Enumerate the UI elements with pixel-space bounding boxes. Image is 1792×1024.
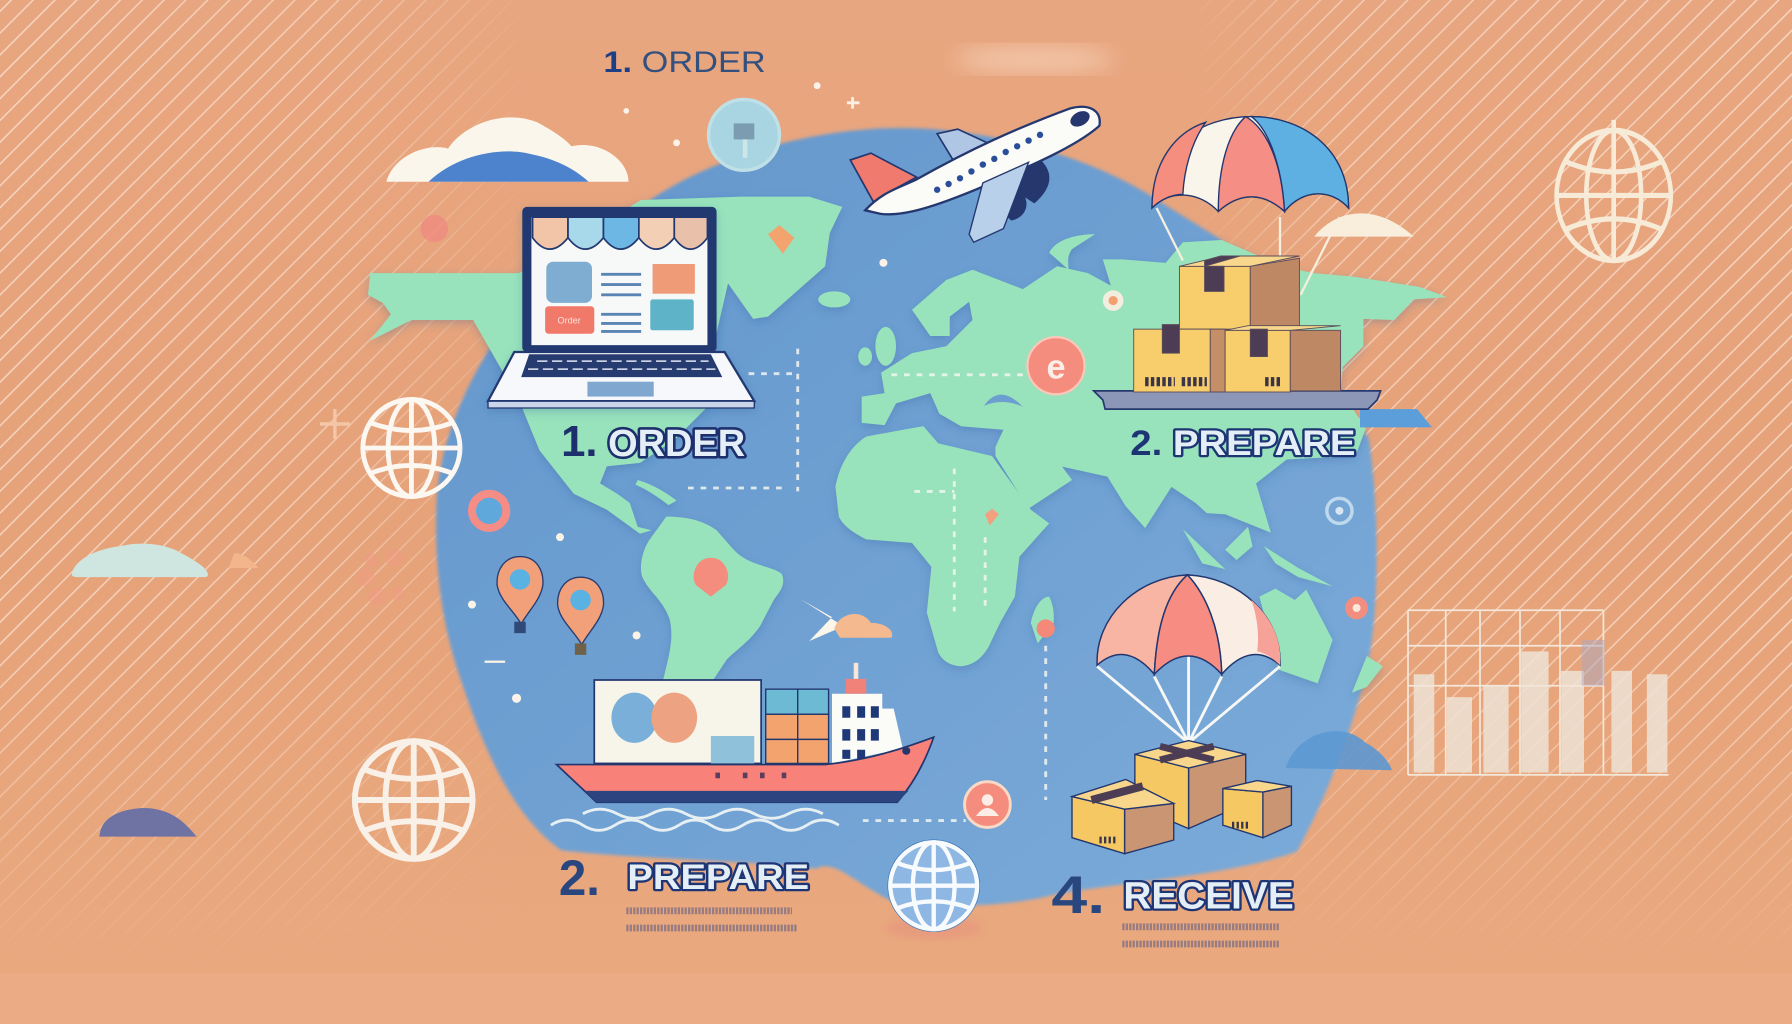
small white specks: [468, 82, 887, 703]
icon: laptop storefront: Order: [557, 315, 581, 325]
icon: salmon badge by ship: [965, 782, 1010, 827]
icon: paper plane and cloud: [800, 599, 892, 641]
shroud lines: [1157, 208, 1339, 295]
continents: [368, 197, 1447, 693]
containers: [766, 689, 829, 763]
step word: prepare: PREPARE: [627, 857, 809, 897]
land: cuba arc: [635, 480, 677, 505]
map pin right: [558, 577, 604, 655]
small salmon badge: e: [1046, 348, 1066, 386]
land: africa: [835, 426, 1049, 666]
parcels: [1072, 741, 1291, 854]
pale salmon blotch: [357, 549, 405, 606]
map pin left: [497, 557, 543, 633]
small map markers: [320, 97, 1368, 638]
waves: [551, 809, 839, 830]
indigo cloud: [99, 808, 197, 837]
icon: globe outline top right: [1557, 120, 1671, 263]
icon: laptop storefront: [488, 207, 754, 408]
icon: cargo ship: [551, 663, 934, 830]
step label: 2. prepare (lower): 2.: [559, 849, 600, 906]
superstructure: [832, 694, 903, 763]
blue patch: [1360, 409, 1432, 427]
canopy: [1152, 117, 1349, 211]
icon: teal badge: [709, 99, 779, 170]
step label: 1. order: 1. ORDER: [561, 418, 745, 466]
land: north america: [368, 197, 842, 534]
small cloud: [1314, 213, 1414, 237]
small salmon badge: [1027, 337, 1085, 394]
icon: cloud with blue mound: [386, 117, 629, 182]
icon: white globe left lower: [355, 741, 473, 859]
dashed route lines: [688, 349, 1046, 821]
parcels: [1134, 256, 1341, 392]
step word: receive: RECEIVE: [1123, 875, 1294, 917]
orange cloud fragment: [229, 553, 258, 568]
pale teal cloud: [72, 544, 208, 577]
icon: decorative ring and pins: [472, 494, 604, 655]
globe ocean: [436, 128, 1377, 906]
illegible caption lines under prepare: [626, 911, 797, 928]
icon: blue-white globe bottom: [886, 841, 982, 939]
bar chart, faded: [1408, 610, 1669, 775]
awning: [533, 217, 707, 249]
black sea: [984, 395, 1023, 407]
step label: 2. prepare (upper): 2. PREPARE: [1130, 423, 1355, 463]
icon: blue mound cloud lower right: [1286, 731, 1392, 770]
illegible caption lines under receive: [1122, 927, 1280, 944]
shelf: [1094, 391, 1381, 409]
soft background clouds: [72, 544, 405, 837]
shroud lines: [1097, 654, 1280, 743]
icon: parachute with delivered parcels: [1072, 575, 1291, 854]
icon: white globe left upper: [363, 399, 460, 497]
icon: airplane: [850, 107, 1100, 242]
land: eurasia: [862, 240, 1447, 533]
icon: parachute with stacked parcels: [1094, 117, 1432, 427]
hull: [557, 737, 934, 802]
top heading: 1. order: 1. ORDER: [603, 46, 766, 79]
land: islands: [1049, 234, 1095, 270]
land: south america: [641, 517, 783, 686]
cargo panel: [594, 680, 761, 763]
step label: 4. receive: 4.: [1051, 866, 1105, 925]
canopy: [1097, 575, 1280, 674]
world globe with continents: [368, 128, 1447, 906]
